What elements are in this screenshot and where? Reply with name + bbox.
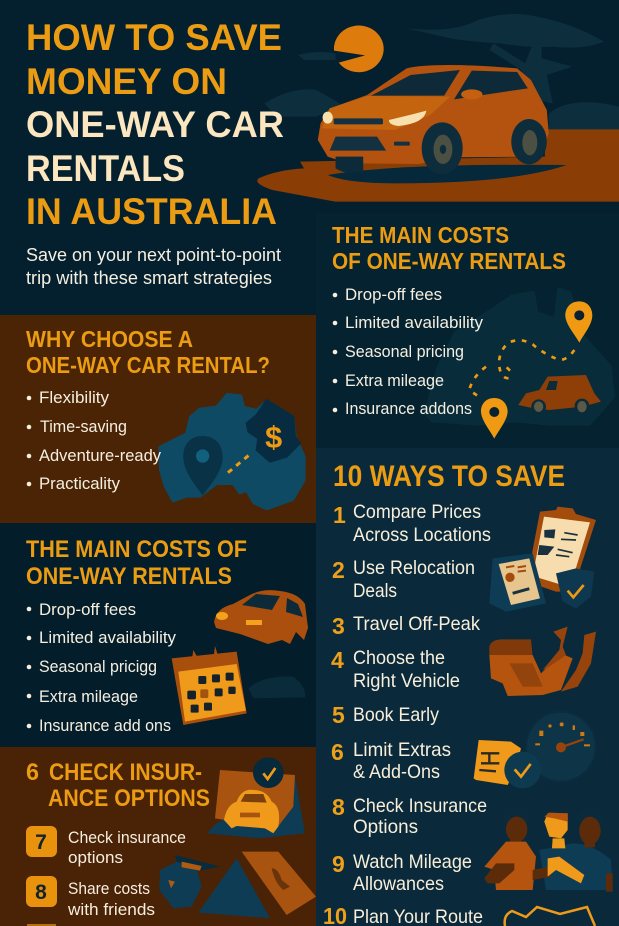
list: steps 1 to 10: Watch Mileage [353,851,472,873]
list: steps 1 to 10: Allowances [353,873,444,895]
icon: australia map with pin and dollar shield [160,395,304,509]
title: RENTALS [26,148,185,189]
list: steps 1 to 10: Right Vehicle [353,670,460,692]
list: steps 1 to 10: 9 [332,851,345,877]
heading: check insurance: 6 [26,759,39,786]
title: HOW TO SAVE [26,17,282,58]
icon: gauge and checklist [474,712,596,788]
list: main costs right bullets: Seasonal pricing [345,342,464,361]
list: main costs left bullets: Drop-off fees [39,600,136,619]
list: steps 1 to 10: Deals [353,580,397,602]
icon: vehicle interior [489,627,596,696]
list: steps 1 to 10: 3 [332,613,345,639]
subtitle [26,245,281,288]
icon: calendar [172,646,305,725]
list: why choose bullets: Time-saving [40,417,127,436]
panel: main costs left [0,523,316,747]
step 8: Share costs [68,879,150,898]
list: why choose bullets: Practicality [39,474,120,493]
list: main costs right bullets: Drop-off fees [345,285,442,304]
list: steps 1 to 10: Across Locations [353,524,491,546]
list: main costs left bullets: Extra mileage [39,687,138,706]
heading: main costs left [26,536,247,590]
icon: tent and backpack [159,852,316,918]
heading: main costs right: THE MAIN COSTS [332,222,509,248]
list: main costs left bullets: Insurance add ons [39,716,171,735]
list: main costs left bullets: Limited availability [39,628,176,647]
list: steps 1 to 10: Use Relocation [353,557,475,579]
list: why choose bullets: Adventure-ready [39,446,161,465]
icon: insured car card [207,757,305,838]
panel: why choose a one-way car rental [0,315,316,523]
list: steps 1 to 10: Compare Prices [353,501,481,523]
heading: why choose: ONE-WAY CAR RENTAL? [26,352,270,378]
list: main costs right bullets: Extra mileage [345,371,444,390]
step 7: Check insurance [68,828,186,847]
icon: three friends [484,806,613,892]
icon: australia map with pin and dollar shield: $ [265,420,282,454]
list: steps 1 to 10: 5 [332,702,345,728]
list: main costs right bullets: Limited availability [345,313,483,332]
list: steps 1 to 10: 2 [332,557,345,583]
heading: main costs left: ONE-WAY RENTALS [26,563,232,590]
panel: check insurance options [0,747,316,926]
list: steps 1 to 10: Limit Extras [353,739,451,761]
list: steps 1 to 10: 4 [331,647,344,673]
panel: 10 ways to save [316,448,619,926]
list: main costs left bullets: Seasonal pricigg [39,657,157,676]
step 7: options [68,848,123,867]
icon: small orange car [214,590,308,644]
title: ONE-WAY CAR [26,104,284,145]
hero illustration: car at sunset [257,14,619,202]
heading: main costs left: THE MAIN COSTS OF [26,536,247,563]
list: why choose bullets [27,388,161,493]
list: steps 1 to 10: 8 [332,794,345,820]
list: steps 1 to 10: Book Early [353,704,439,726]
list: steps 1 to 10: 1 [333,502,346,528]
list: steps 1 to 10: Choose the [353,647,445,669]
heading: main costs right [332,222,566,274]
icon: route map with pins and van [426,290,613,439]
heading: why choose [26,326,270,378]
heading: why choose: WHY CHOOSE A [26,326,193,352]
panel: main costs right [316,213,619,448]
list: steps 1 to 10: Travel Off-Peak [353,613,480,635]
title: IN AUSTRALIA [26,191,277,232]
heading: check insurance: ANCE OPTIONS [48,785,210,812]
icon: folded map [505,907,595,926]
step 8: 8 [35,881,47,904]
heading: main costs right: OF ONE-WAY RENTALS [332,248,566,274]
subtitle: trip with these smart strategies [26,268,272,288]
list: steps 1 to 10: Check Insurance [353,795,487,817]
heading: 10 ways to save: 10 WAYS TO SAVE [333,460,565,493]
list: steps 1 to 10: Options [353,816,418,838]
heading: check insurance: CHECK INSUR- [49,759,202,786]
list: main costs left bullets [27,600,176,735]
step 7: 7 [35,831,47,854]
step 8: with friends [67,900,155,919]
list: main costs right bullets [333,285,483,418]
title [26,17,284,232]
subtitle: Save on your next point-to-point [26,245,281,265]
list: why choose bullets: Flexibility [39,388,109,407]
list: main costs right bullets: Insurance addons [345,399,472,418]
list: steps 1 to 10: & Add-Ons [353,761,440,783]
step 8 [26,876,155,919]
list: steps 1 to 10 [323,501,491,926]
title: MONEY ON [26,61,227,102]
list: steps 1 to 10: 6 [331,739,344,765]
icon: clipboard documents and shield [489,507,596,612]
next step box, cut off at page edge [27,924,56,926]
step 7 [26,826,186,867]
heading: check insurance [26,759,210,812]
